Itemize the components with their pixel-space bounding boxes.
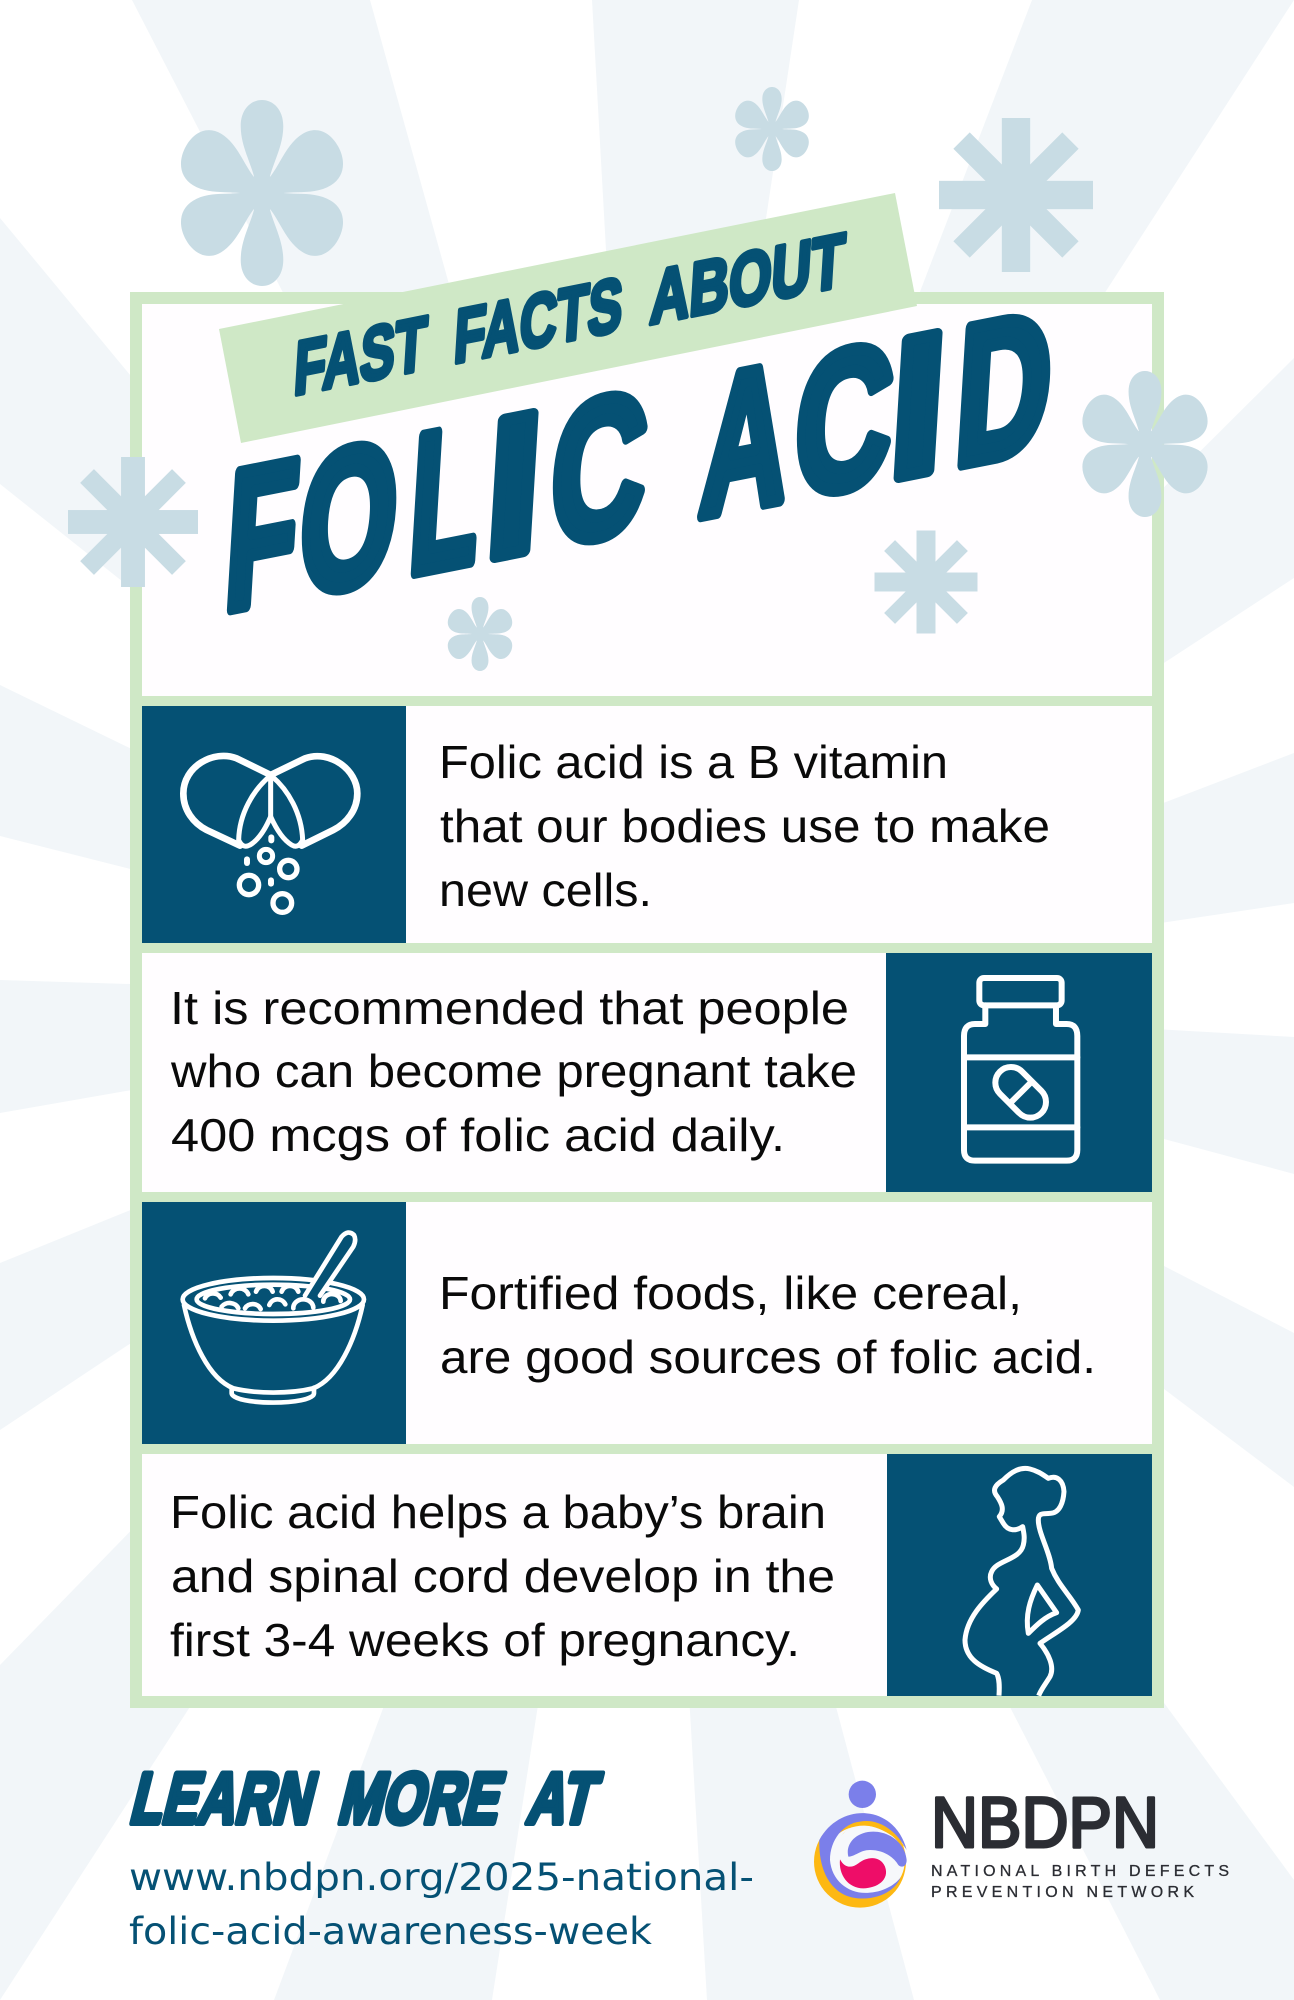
green frame [130,292,1164,1708]
website url [129,1856,754,1953]
website url: folic-acid-awareness-week [129,1910,653,1953]
title: folic acid: C [545,349,653,589]
title: folic acid: A [695,321,795,559]
learn more at heading: LEARN [124,1759,325,1839]
title panel [142,304,1152,696]
fact 2 text: It is recommended that people [170,982,849,1034]
fact 1 text: that our bodies use to make [440,800,1050,852]
icon: pregnant person outline [965,1468,1078,1696]
fact 1 text [439,736,1050,916]
logo tagline [931,1863,1229,1901]
fact 3 text: Fortified foods, like cereal, [439,1267,1022,1319]
icon box: cereal bowl [142,1202,406,1444]
title: folic acid: L [404,382,486,617]
icon box: capsule [142,706,406,943]
fact 4 text [170,1486,835,1666]
title: folic acid: O [294,399,404,638]
banner heading: fast facts about: ABOUT [648,217,847,341]
decorative flowers and stars [68,87,1215,671]
logo mark [814,1781,907,1908]
fact 4 text: and spinal cord develop in the [171,1550,835,1602]
fact 1 text: new cells. [439,864,652,916]
title: folic acid: D [950,269,1058,508]
learn more at heading [124,1759,607,1839]
logo tagline: PREVENTION NETWORK [931,1884,1194,1901]
title: folic acid: I [884,290,952,521]
icon box: pregnant silhouette [887,1454,1152,1696]
title: folic acid: I [480,370,548,601]
panel: fact 4 [142,1454,1152,1696]
fact 4 text: Folic acid helps a baby’s brain [170,1486,826,1538]
banner heading: fast facts about: FACTS [452,261,625,380]
logo: NBDPN [814,1781,1229,1908]
fact 3 text [439,1267,1096,1383]
fact 2 text [170,982,857,1161]
fact 1 text: Folic acid is a B vitamin [439,736,948,788]
learn more at heading: AT [521,1759,607,1839]
fact 2 text: who can become pregnant take [170,1045,857,1097]
title: folic acid: C [789,301,899,540]
icon: bowl with spoon [183,1233,364,1403]
title: folic acid [220,269,1058,653]
logo tagline: NATIONAL BIRTH DEFECTS [931,1863,1229,1880]
icon box: supplement bottle [886,953,1152,1192]
fact 2 text: 400 mcgs of folic acid daily. [171,1109,785,1161]
panel: fact 1 [142,706,1152,943]
title: folic acid: F [220,418,304,653]
panel: fact 3 [142,1202,1152,1444]
fact 3 text: are good sources of folic acid. [440,1331,1096,1383]
icon: bottle [964,978,1077,1161]
banner heading: fast facts about: FAST [292,300,429,412]
panel: fact 2 [142,953,1152,1192]
logo wordmark: NBDPN [931,1784,1159,1863]
fact 4 text: first 3-4 weeks of pregnancy. [170,1614,800,1666]
banner heading: fast facts about [292,217,847,412]
icon: open capsule with granules [183,756,357,912]
learn more at heading: MORE [332,1759,512,1839]
banner [219,193,917,443]
website url: www.nbdpn.org/2025-national- [129,1856,754,1899]
